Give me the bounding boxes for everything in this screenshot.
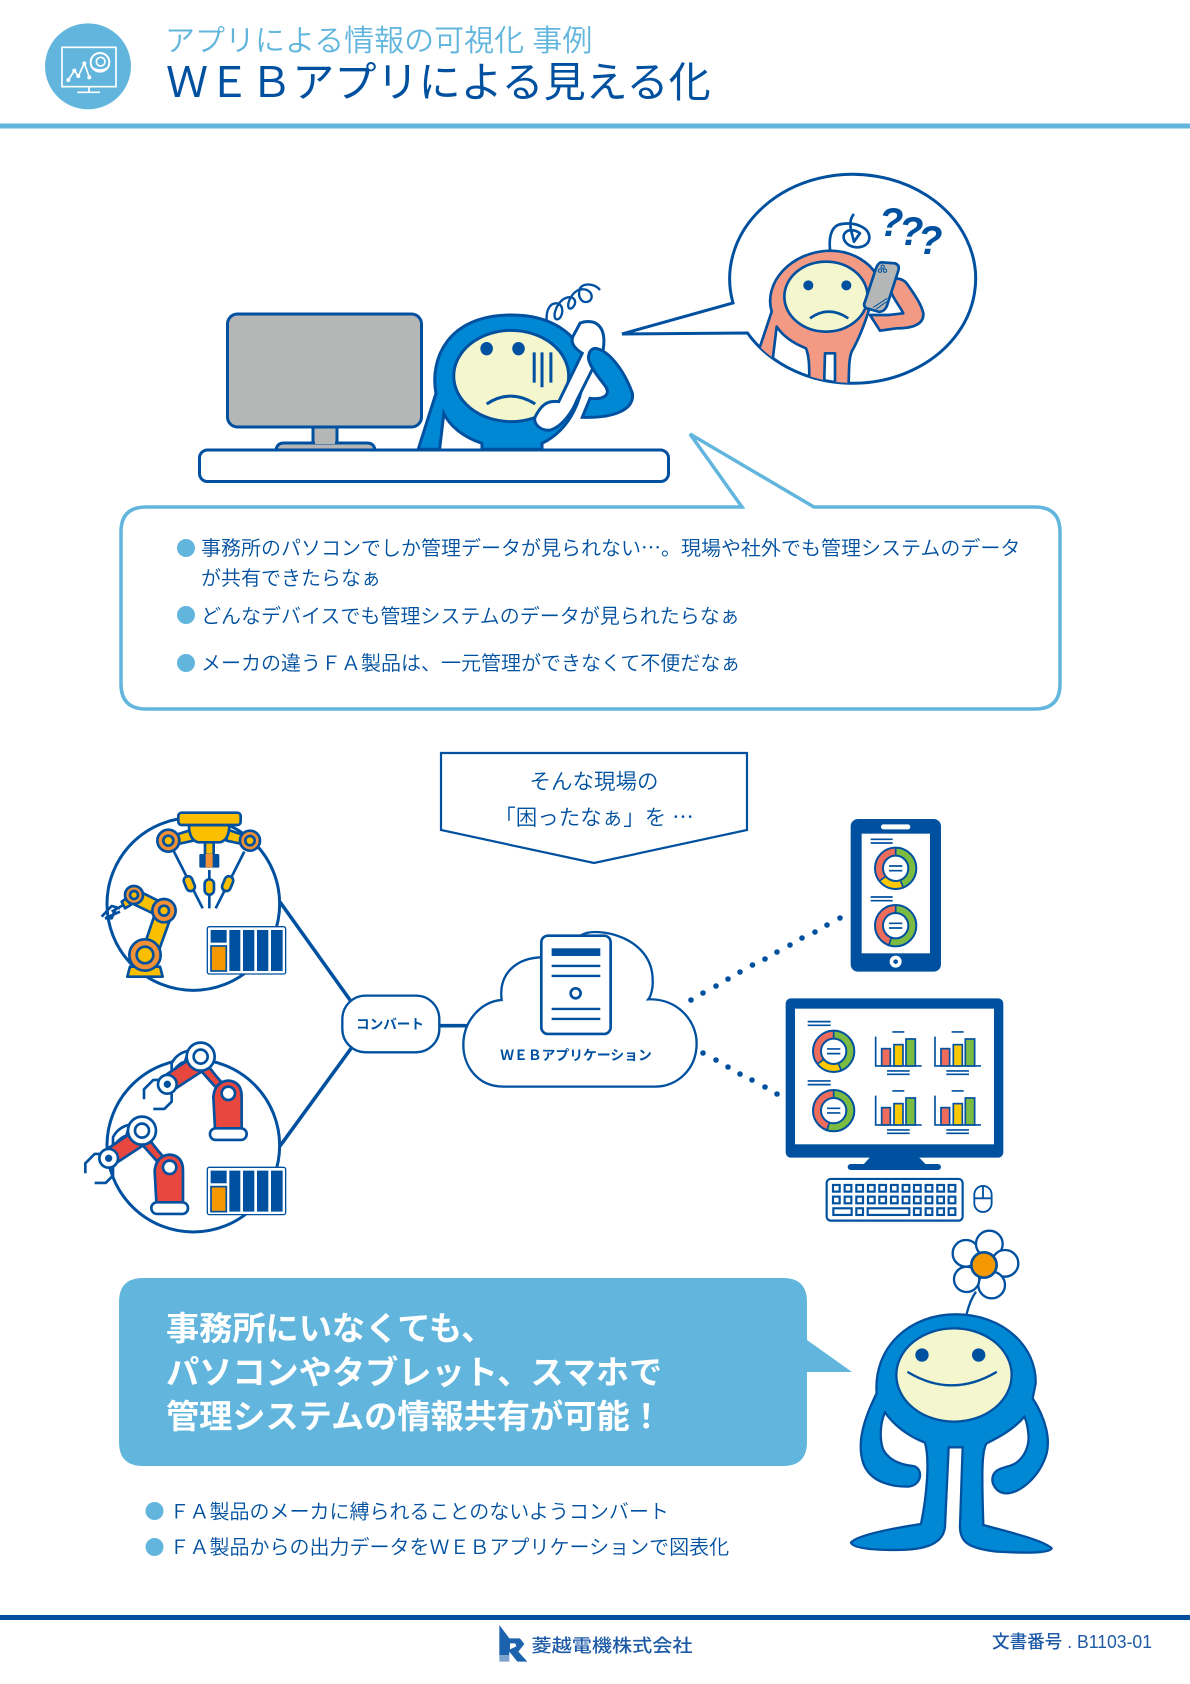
robot 2 <box>85 1117 188 1214</box>
document number: 文書番号 . B1103-01 <box>992 1632 1152 1652</box>
subtitle: アプリによる情報の可視化 事例 <box>165 25 592 58</box>
panel: conclusion: パソコンやタブレット、スマホで <box>166 1354 662 1392</box>
cloud and converter <box>342 932 697 1087</box>
server <box>541 936 611 1034</box>
callout panel: worries <box>121 434 1060 709</box>
banner: そんな現場の: 「困ったなぁ」を … <box>494 801 694 832</box>
bullet 1: が共有できたらなぁ <box>201 567 381 590</box>
bullet list: solution points <box>146 1500 729 1559</box>
illustration: office desk scene <box>200 284 668 482</box>
robot 1 <box>144 1043 247 1140</box>
point 2: ＦＡ製品からの出力データをＷＥＢアプリケーションで図表化 <box>170 1536 729 1559</box>
cloud <box>463 932 697 1087</box>
bullet 2: どんなデバイスでも管理システムのデータが見られたらなぁ <box>201 605 740 628</box>
diagram: red robots and PLC <box>85 1043 286 1232</box>
panel: conclusion: 管理システムの情報共有が可能！ <box>166 1398 663 1436</box>
desktop monitor <box>786 998 1003 1170</box>
point 1: ＦＡ製品のメーカに縛られることのないようコンバート <box>170 1500 669 1524</box>
PLC unit <box>207 927 286 974</box>
converter box <box>342 996 439 1052</box>
desk <box>200 450 668 482</box>
company name: 菱越電機株式会社 <box>532 1636 692 1656</box>
label: web application: ＷＥＢアプリケーション <box>500 1048 652 1063</box>
question marks <box>879 201 942 263</box>
PLC unit <box>207 1167 286 1215</box>
question marks: ? <box>899 210 923 254</box>
bullet 3: メーカの違うＦＡ製品は、一元管理ができなくて不便だなぁ <box>201 652 740 675</box>
delta robot <box>157 813 260 908</box>
diagram: yellow robots and PLC <box>102 813 286 990</box>
header <box>0 23 1190 128</box>
question marks: ? <box>879 201 903 245</box>
character: smiling mascot <box>851 1231 1052 1553</box>
icon: monitor with chart <box>45 23 131 109</box>
monitor <box>228 314 422 450</box>
question marks: ? <box>918 219 942 263</box>
title: ＷＥＢアプリによる見える化 <box>166 59 711 106</box>
mouse <box>974 1186 992 1212</box>
banner: そんな現場の <box>441 753 747 863</box>
devices <box>786 819 1003 1221</box>
connection lines <box>280 902 470 1146</box>
label: converter: コンバート <box>356 1017 424 1032</box>
logo mark <box>499 1625 527 1662</box>
footer <box>0 1615 1190 1662</box>
bullet 1 <box>177 532 1020 590</box>
panel: conclusion: 事務所にいなくても、 <box>166 1311 494 1348</box>
banner: そんな現場の: そんな現場の <box>529 770 659 794</box>
keyboard <box>827 1179 963 1221</box>
header rule <box>0 124 1190 128</box>
character: blue on phone <box>418 284 633 449</box>
speech bubble: remote worker <box>622 174 976 390</box>
bullet 1: 事務所のパソコンでしか管理データが見られない…。現場や社外でも管理システムのデータ <box>201 532 1020 561</box>
dotted link: desktop <box>700 1050 780 1097</box>
panel: conclusion <box>119 1278 852 1466</box>
character: pink on smartphone <box>757 214 923 390</box>
dotted link: tablet <box>688 915 843 1003</box>
articulated robot <box>102 886 176 977</box>
curl <box>547 284 600 320</box>
tablet <box>851 819 941 972</box>
